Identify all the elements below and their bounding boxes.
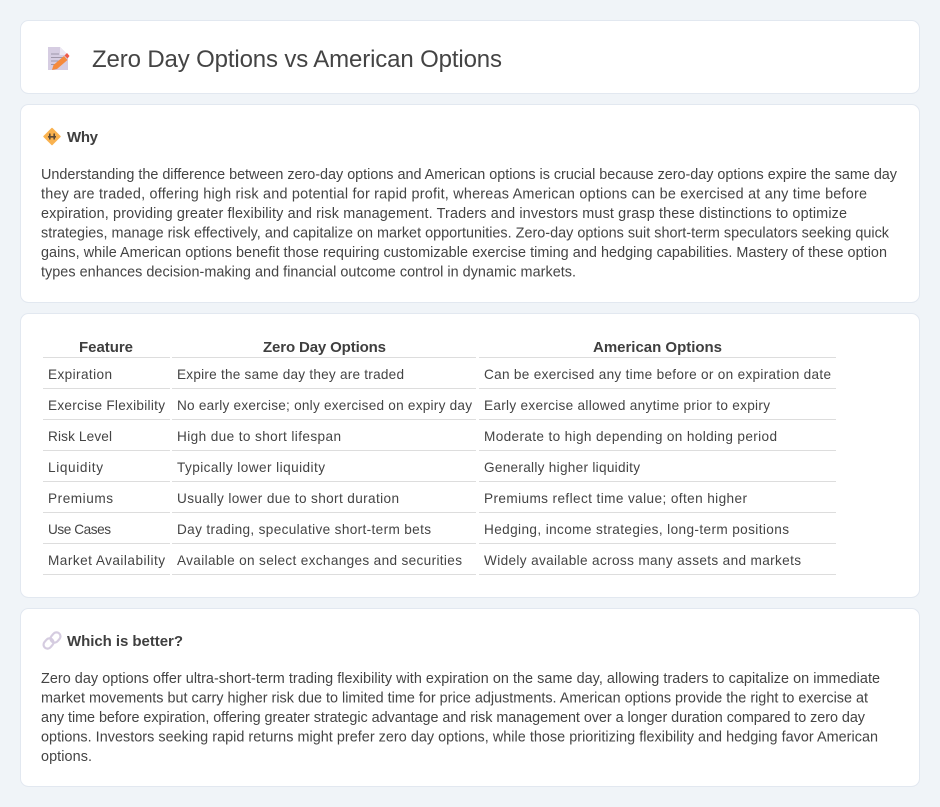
text block: why explanation: gains, while American options benefit those requiring customizable exercise timing and hedging capabilities. Mastery of these option [41, 245, 887, 261]
row: use cases [48, 522, 789, 537]
row: exercise flexibility: Exercise Flexibility [48, 398, 165, 413]
text block: why explanation: they are traded, offering high risk and potential for rapid profit, whereas American options can be exercised at any time before [41, 186, 867, 202]
row: expiration: Expiration [48, 367, 112, 382]
row: exercise flexibility: Early exercise allowed anytime prior to expiry [484, 398, 770, 413]
text block: why explanation: expiration, providing greater flexibility and risk management. Traders and investors must grasp these distinctions to optimize [41, 206, 847, 222]
panel: header [20, 20, 920, 94]
text block: which is better explanation: options. Investors seeking rapid returns might prefer zero day options, while those prioritizing flexibility and hedging favor American [41, 730, 878, 746]
panel: comparison table [20, 314, 920, 598]
heading: which is better: Which is better? [67, 633, 183, 650]
row: liquidity: Generally higher liquidity [484, 460, 640, 475]
row: premiums [48, 491, 747, 506]
text block: which is better explanation: options. [41, 749, 92, 765]
row: exercise flexibility: No early exercise; only exercised on expiry day [177, 398, 472, 413]
text block: which is better explanation: market movements but carry higher risk due to limited time for price adjustments. American options provide the right to exercise at [41, 690, 868, 706]
row: exercise flexibility [48, 398, 770, 413]
text block: why explanation: Understanding the difference between zero-day options and American options is crucial because zero-day options expire the same day [41, 167, 898, 183]
panel: which is better [20, 608, 920, 786]
text block: which is better explanation: any time before expiration, offering greater strategic advantage and risk management over a longer duration compared to zero day [41, 710, 866, 726]
row: liquidity: Liquidity [48, 460, 103, 475]
row: premiums: Premiums reflect time value; often higher [484, 491, 747, 506]
icon: warning diamond [44, 128, 60, 144]
heading: why: Why [67, 129, 99, 146]
icon: chain link [42, 631, 62, 650]
row: use cases: Use Cases [48, 522, 111, 537]
text block: why explanation: types enhances decision-making and financial outcome control in dynamic markets. [41, 264, 576, 280]
row: market availability [48, 553, 801, 568]
row: market availability: Market Availability [48, 553, 165, 568]
row: liquidity [48, 460, 640, 475]
table header: Zero Day Options [263, 339, 386, 356]
row: use cases: Hedging, income strategies, long-term positions [484, 522, 789, 537]
row: use cases: Day trading, speculative short-term bets [177, 522, 431, 537]
row: expiration [48, 367, 831, 382]
row: premiums: Premiums [48, 491, 113, 506]
text block: which is better explanation [41, 671, 880, 765]
row: liquidity: Typically lower liquidity [177, 460, 325, 475]
row: expiration: Can be exercised any time before or on expiration date [484, 367, 831, 382]
icon: document with pencil [48, 47, 70, 70]
table header: American Options [593, 339, 722, 356]
table header [79, 339, 722, 356]
row: premiums: Usually lower due to short duration [177, 491, 399, 506]
table header: Feature [79, 339, 133, 356]
row: risk level [48, 429, 777, 444]
row: market availability: Widely available across many assets and markets [484, 553, 801, 568]
row: market availability: Available on select exchanges and securities [177, 553, 462, 568]
text block: why explanation: strategies, manage risk effectively, and capitalize on market opportunities. Zero-day options suit short-term speculators seeking quick [41, 226, 890, 242]
text block: why explanation [41, 167, 898, 280]
text block: which is better explanation: Zero day options offer ultra-short-term trading flexibility with expiration on the same day, allowing traders to capitalize on immediate [41, 671, 880, 687]
row: expiration: Expire the same day they are traded [177, 367, 404, 382]
title: Zero Day Options vs American Options [92, 46, 502, 73]
row: risk level: High due to short lifespan [177, 429, 341, 444]
row: risk level: Risk Level [48, 429, 112, 444]
row: risk level: Moderate to high depending on holding period [484, 429, 777, 444]
panel: why [20, 104, 920, 302]
